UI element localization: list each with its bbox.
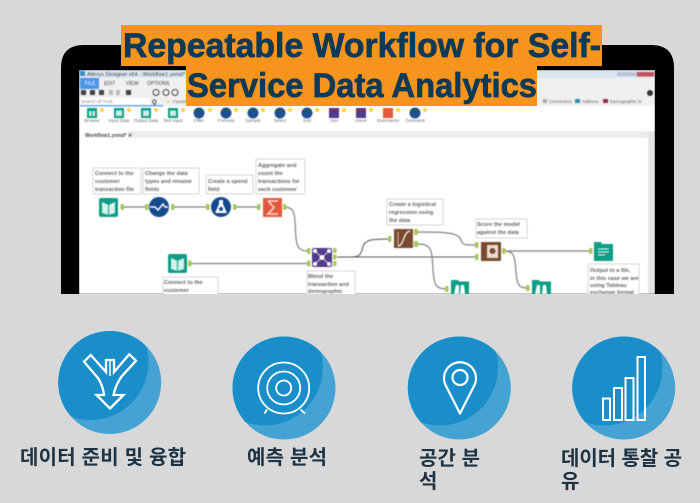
- workflow annotation boxes: types and rename: [145, 179, 192, 185]
- label: predictive analytics: 예측 분석: [247, 446, 327, 469]
- workflow annotation boxes: using Tableau: [590, 283, 627, 289]
- tool palette: Sample: [245, 118, 261, 123]
- workflow annotation boxes: Change the data: [145, 171, 189, 177]
- icon: browse 2: [532, 280, 551, 296]
- workflow annotation boxes: [93, 159, 639, 307]
- workflow annotation boxes: each customer: [258, 187, 298, 193]
- ribbon: Connectors: [549, 99, 573, 104]
- workflow annotation boxes: Aggregate and: [258, 163, 297, 169]
- workflow annotation boxes: transaction file: [95, 187, 134, 193]
- icon: input book: [99, 198, 118, 217]
- ribbon: Demographic In: [610, 99, 642, 104]
- ribbon: [79, 78, 655, 106]
- workflow tab bar: [79, 131, 649, 139]
- scrollbar: [648, 131, 655, 294]
- tool palette: Filter: [194, 118, 205, 123]
- workflow annotation boxes: field: [208, 187, 219, 193]
- tool palette: Join: [330, 118, 339, 123]
- ribbon: VIEW: [126, 81, 139, 87]
- title text: Repeatable Workflow for Self-: [123, 27, 601, 65]
- tool palette: Text Input: [163, 118, 184, 123]
- laptop with software screenshot: [61, 45, 674, 307]
- label: spatial analytics: 석: [419, 470, 437, 493]
- tool palette: Formula: [218, 118, 235, 123]
- workflow annotation boxes: transaction and: [308, 282, 349, 288]
- label: spatial analytics: [419, 447, 480, 493]
- workflow annotation boxes: Create a logistical: [389, 202, 437, 208]
- tool palette: Input Data: [109, 118, 130, 123]
- workflow annotation boxes: demographic: [308, 289, 343, 295]
- workflow tab bar: Workflow1.yxmd* ✕: [85, 133, 132, 139]
- label: sharing data insights: 유: [561, 471, 579, 493]
- ribbon: FILE: [85, 81, 96, 87]
- workflow connectors: [122, 207, 591, 289]
- icon: merging arrows: [58, 331, 162, 434]
- window title bar: [79, 70, 655, 78]
- workflow annotation boxes: Score the model: [477, 222, 520, 228]
- tool palette: Browse: [84, 118, 100, 123]
- workflow annotation boxes: the data: [389, 218, 411, 224]
- connection anchors: [120, 204, 592, 292]
- ribbon: Address: [582, 99, 599, 104]
- ribbon: OPTIONS: [147, 81, 170, 87]
- tool palette: Sort: [303, 118, 312, 123]
- icon: join blend: [312, 248, 332, 267]
- label: spatial analytics: 공간 분: [419, 447, 480, 470]
- workflow annotation boxes: count the: [258, 171, 283, 177]
- icon: map pin: [408, 336, 511, 440]
- ribbon: Search All Tools: [81, 99, 114, 104]
- icon: formula flask: [211, 197, 231, 217]
- icon: select: [149, 197, 169, 217]
- label: data preparation and blending: 데이터 준비 및 융합: [20, 446, 186, 469]
- icon: bar chart: [572, 336, 676, 440]
- workflow annotation boxes: Create a spend: [208, 179, 247, 185]
- tool palette: Comment: [405, 118, 425, 123]
- workflow annotation boxes: fields: [145, 187, 159, 193]
- workflow annotation boxes: transactions for: [258, 179, 300, 185]
- software window: [79, 70, 655, 307]
- title: Service Data Analytics: [187, 67, 537, 105]
- tool palette: Output Data: [134, 118, 159, 123]
- workflow annotation boxes: regression using: [389, 210, 433, 216]
- icon: output: [594, 242, 613, 261]
- icon: summarize sigma: [263, 198, 282, 217]
- window title bar: Alteryx Designer x64 - Workflow1.yxmd*: [87, 72, 186, 78]
- workflow annotation boxes: customer: [95, 179, 121, 185]
- icon: score: [481, 242, 501, 261]
- workflow annotation boxes: exchange format: [590, 290, 634, 296]
- workflow annotation boxes: Blend the: [308, 274, 333, 280]
- ribbon: EDIT: [104, 81, 115, 87]
- ribbon: Favorites: [173, 99, 192, 104]
- tool palette: Select: [274, 118, 287, 123]
- label: sharing data insights: [561, 447, 682, 493]
- tool palette: Union: [355, 118, 367, 123]
- workflow annotation boxes: customer: [164, 288, 190, 294]
- workflow annotation boxes: Connect to the: [164, 280, 202, 286]
- workflow annotation boxes: against the data: [477, 230, 520, 236]
- label: sharing data insights: 데이터 통찰 공: [561, 447, 682, 470]
- title highlight: [121, 25, 602, 106]
- ribbon: ★: [166, 99, 171, 105]
- tool palette: Summarize: [377, 118, 400, 123]
- icon: target: [232, 336, 336, 440]
- laptop bezel: [61, 45, 674, 294]
- icon: logistic regression: [394, 229, 413, 248]
- title: [121, 25, 602, 106]
- workflow tool icons: [99, 197, 613, 296]
- tool palette: [84, 108, 427, 123]
- icon: browse 1: [451, 280, 469, 296]
- icon: input book 2: [168, 254, 187, 273]
- workflow annotation boxes: in this case we are: [590, 276, 639, 282]
- workflow annotation boxes: Connect to the: [95, 171, 134, 177]
- ribbon: Q: [152, 100, 157, 106]
- workflow annotation boxes: Output to a file,: [590, 268, 631, 274]
